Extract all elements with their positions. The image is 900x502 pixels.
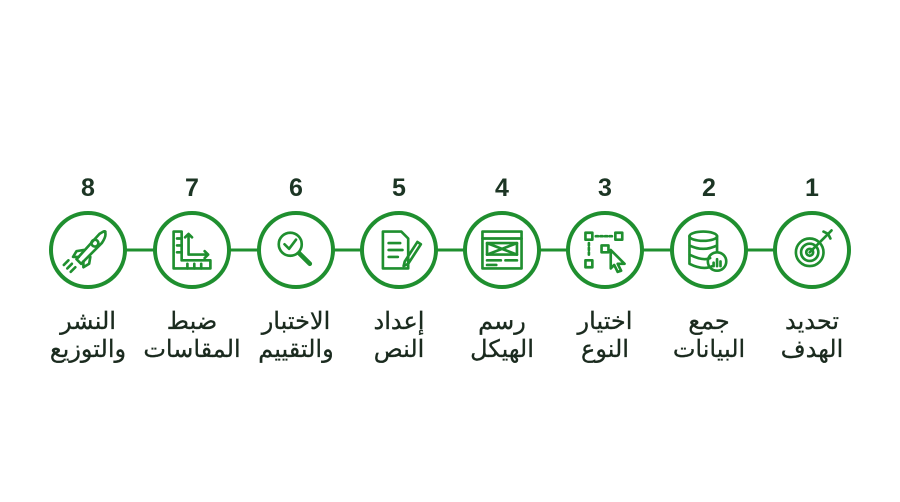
icon: select cursor — [585, 233, 625, 272]
step 7: المقاسات — [143, 336, 241, 363]
step 6: 6 — [289, 174, 303, 202]
icon: wireframe — [482, 232, 522, 268]
icon: database chart — [689, 232, 726, 271]
step 2: 2 — [702, 174, 716, 202]
icon: rocket — [64, 231, 105, 272]
step 3: 3 — [598, 174, 612, 202]
step 1: تحديد — [785, 308, 839, 335]
step 5: النص — [374, 336, 424, 363]
step 3: اختيار — [577, 308, 632, 335]
step 7 — [143, 174, 241, 363]
icon: target — [796, 230, 832, 266]
icon: document pencil — [383, 232, 421, 268]
step 5: 5 — [392, 174, 406, 202]
step 7: ضبط — [167, 308, 217, 335]
icon: ruler — [174, 232, 210, 268]
step 6: والتقييم — [258, 336, 334, 363]
step 3 — [568, 174, 642, 363]
step 4: 4 — [495, 174, 509, 202]
step 7: 7 — [185, 174, 199, 202]
step 2: البيانات — [673, 336, 745, 363]
step 5 — [362, 174, 436, 363]
step 8: النشر — [59, 308, 116, 335]
step 6 — [258, 174, 334, 363]
step 4: الهيكل — [470, 336, 534, 363]
connector line — [88, 248, 812, 252]
step 4: رسم — [478, 308, 526, 335]
step 5: إعداد — [374, 308, 424, 335]
step 1: 1 — [805, 174, 819, 202]
step 2 — [672, 174, 746, 363]
step 1 — [775, 174, 849, 363]
step 6: الاختبار — [261, 308, 330, 335]
step 3: النوع — [581, 336, 629, 363]
step 8: 8 — [81, 174, 95, 202]
icon: magnifier check — [279, 233, 310, 264]
step 2: جمع — [688, 308, 730, 335]
step 1: الهدف — [781, 336, 843, 363]
step 8: والتوزيع — [50, 336, 126, 363]
step 8 — [50, 174, 126, 363]
step 4 — [465, 174, 539, 363]
